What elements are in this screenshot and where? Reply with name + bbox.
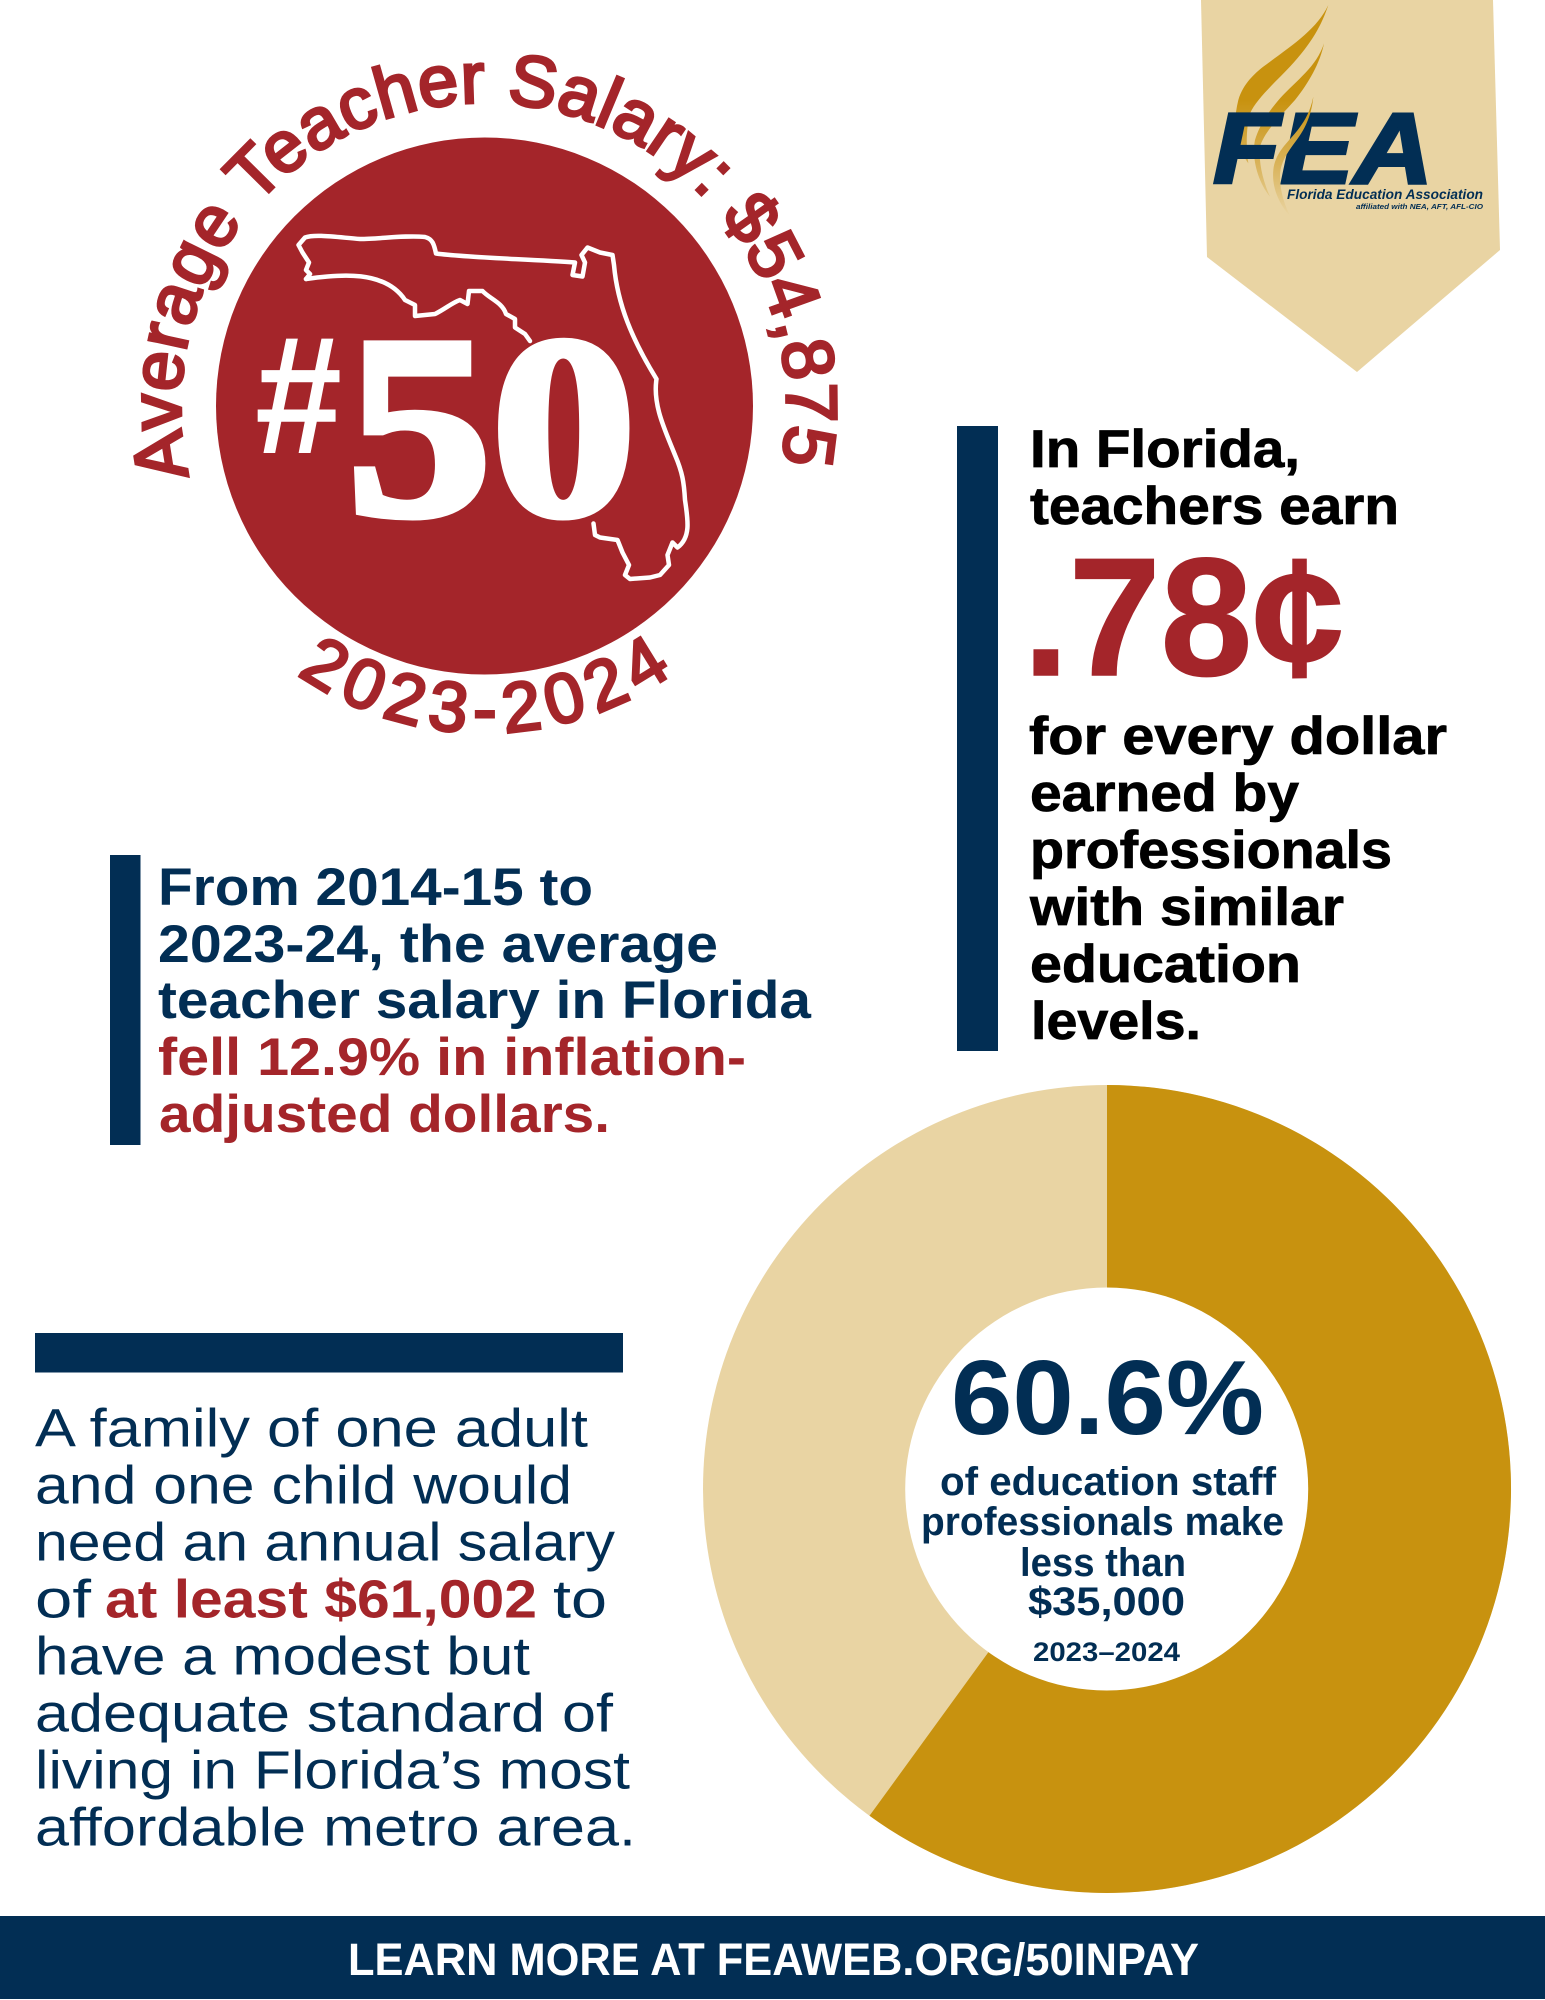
hash sign: # bbox=[255, 301, 342, 489]
donut caption: $35,000 bbox=[1028, 1580, 1185, 1624]
accent bar bbox=[35, 1333, 623, 1372]
small flame over letters bbox=[1273, 97, 1313, 217]
panel: inflation-adjusted salary decline bbox=[110, 855, 812, 1145]
decline text in navy: From 2014-15 to bbox=[158, 858, 593, 917]
donut caption: professionals make bbox=[921, 1500, 1284, 1544]
family budget text: adequate standard of bbox=[35, 1683, 614, 1743]
callout body text: for every dollar bbox=[1029, 707, 1447, 766]
family budget text: at least $61,002 bbox=[105, 1569, 537, 1629]
big stat 78 cents: .78¢ bbox=[1023, 523, 1344, 711]
accent bar bbox=[957, 426, 998, 1051]
logo organisation name: Florida Education Association bbox=[1287, 186, 1483, 202]
curved year label: 2023-2024 bbox=[298, 636, 668, 734]
decline text in red bbox=[158, 1028, 746, 1144]
panel: 78 cents callout bbox=[957, 420, 1447, 1051]
family budget text: A family of one adult bbox=[35, 1398, 588, 1458]
donut caption: less than bbox=[1020, 1541, 1186, 1585]
curved heading: average teacher salary: Average Teacher Salary: $54,875 bbox=[133, 54, 838, 478]
decline text in navy bbox=[158, 858, 812, 1030]
decline text in navy: 2023-24, the average bbox=[158, 915, 718, 974]
family budget text: affordable metro area. bbox=[35, 1797, 636, 1857]
red circle bbox=[216, 138, 753, 674]
decline text in red: fell 12.9% in inflation- bbox=[158, 1028, 746, 1087]
callout body text bbox=[1029, 707, 1447, 1051]
donut track bbox=[703, 1085, 1511, 1893]
icon: Florida state outline bbox=[298, 236, 688, 579]
footer band bbox=[0, 1916, 1545, 1999]
donut caption: of education staff bbox=[940, 1460, 1277, 1504]
logo affiliation: affiliated with NEA, AFT, AFL-CIO bbox=[1356, 202, 1483, 211]
banner pennant bbox=[1201, 0, 1500, 372]
family budget text: have a modest but bbox=[35, 1626, 530, 1686]
number 50: 50 bbox=[347, 284, 636, 571]
donut gold slice bbox=[870, 1085, 1511, 1893]
family budget text: living in Florida’s most bbox=[35, 1740, 630, 1800]
big rank number bbox=[255, 284, 636, 571]
family budget text: and one child would bbox=[35, 1455, 572, 1515]
callout body text: professionals bbox=[1030, 821, 1392, 880]
callout lead text: teachers earn bbox=[1030, 477, 1399, 536]
donut hole bbox=[905, 1288, 1308, 1690]
family budget text bbox=[35, 1398, 636, 1857]
donut year: 2023–2024 bbox=[1033, 1637, 1180, 1667]
donut chart: 60.6 percent bbox=[703, 1085, 1511, 1893]
panel: family cost of living bbox=[35, 1333, 636, 1857]
donut stat: 60.6% bbox=[951, 1339, 1264, 1457]
footer link text: LEARN MORE AT FEAWEB.ORG/50INPAY bbox=[348, 1934, 1199, 1985]
accent bar bbox=[110, 855, 140, 1145]
donut caption bbox=[921, 1460, 1284, 1624]
footer background bbox=[0, 1916, 1545, 1999]
icon: FEA flames bbox=[1235, 5, 1328, 197]
logo banner bbox=[1201, 0, 1500, 372]
callout body text: levels. bbox=[1031, 992, 1201, 1051]
logo letters FEA: FEA bbox=[1213, 93, 1433, 205]
callout body text: earned by bbox=[1030, 764, 1300, 823]
badge: #50 average teacher salary bbox=[133, 54, 838, 734]
decline text in navy: teacher salary in Florida bbox=[158, 971, 812, 1030]
family budget text: to bbox=[553, 1569, 607, 1629]
callout lead text bbox=[1030, 420, 1399, 536]
family budget text: of bbox=[35, 1569, 92, 1629]
callout body text: with similar bbox=[1029, 878, 1344, 937]
decline text in red: adjusted dollars. bbox=[159, 1085, 610, 1144]
family budget text: need an annual salary bbox=[35, 1512, 615, 1572]
callout body text: education bbox=[1030, 935, 1301, 994]
callout lead text: In Florida, bbox=[1030, 420, 1300, 479]
